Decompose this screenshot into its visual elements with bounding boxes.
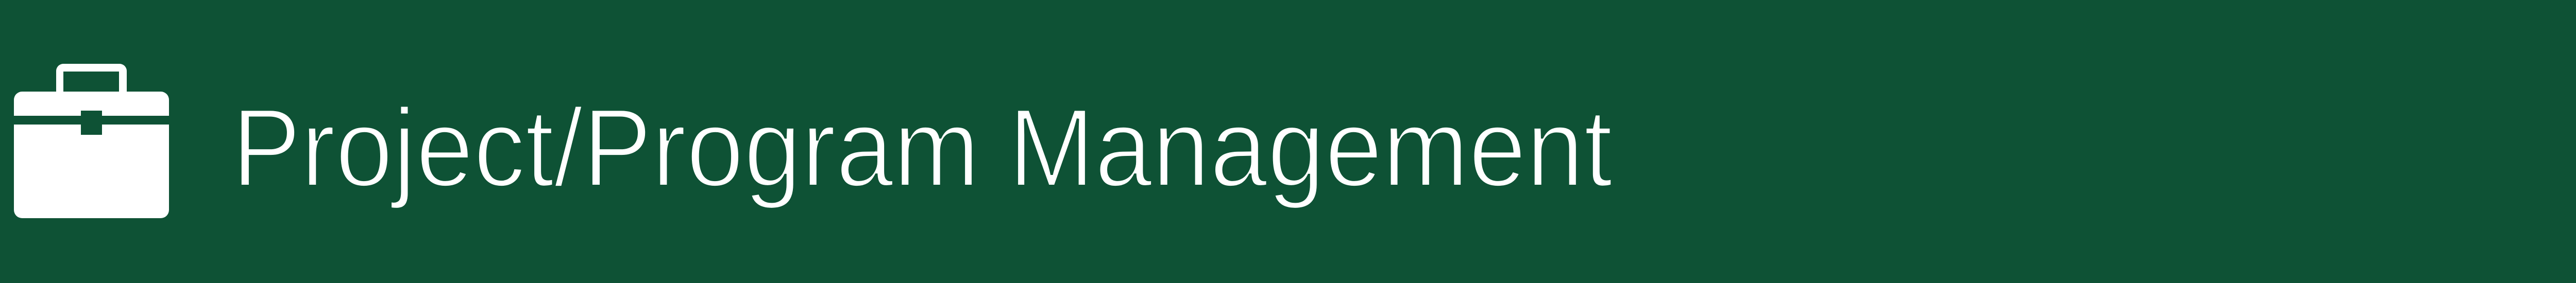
- icon: toolbox briefcase: [14, 64, 169, 218]
- title: Project/Program Management: [232, 85, 1613, 210]
